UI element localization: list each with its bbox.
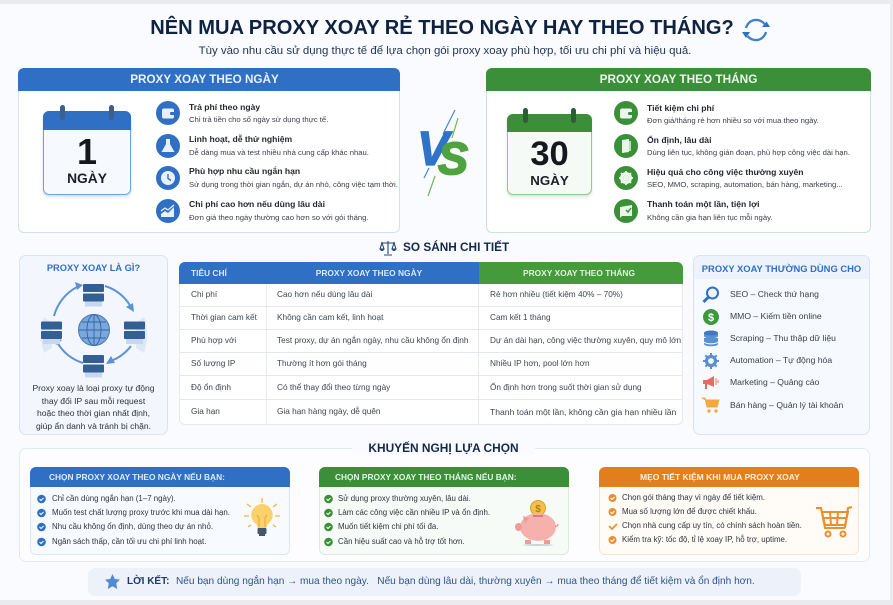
checklist: Muốn test chất lượng proxy trước khi mua dài hạn. [52, 508, 230, 517]
feature: ổn định [614, 134, 850, 158]
feature: ổn định: Dùng liên tục, không gián đoạn, phù hợp công việc dài hạn. [647, 148, 850, 157]
checklist: Ngân sách thấp, cần tối ưu chi phí linh hoạt. [52, 537, 206, 546]
icon: calendar 1 ngày: NGÀY [67, 171, 107, 186]
row: số lượng IP: Nhiều IP hơn, pool lớn hơn [490, 359, 590, 368]
row: độ ổn định [191, 382, 642, 392]
panel heading: PROXY XOAY THƯỜNG DÙNG CHO [702, 263, 861, 274]
icon: VS: S [438, 133, 468, 184]
row: gia hạn [191, 406, 676, 417]
feature: trả phí theo ngày [156, 101, 328, 125]
checklist: Nhu cầu không ổn định, dùng theo dự án nhỏ. [52, 522, 213, 531]
use: automation [703, 353, 832, 369]
feature: chi phí cao: Đơn giá theo ngày thường cao hơn so với gói tháng. [189, 213, 369, 222]
icon: shopping cart [816, 506, 852, 538]
panel heading [486, 68, 871, 91]
card heading: MẸO TIẾT KIỆM KHI MUA PROXY XOAY [640, 472, 800, 482]
feature: hiệu quả: Hiệu quả cho công việc thường xuyên [647, 167, 804, 177]
icon: calendar 30 ngày: NGÀY [530, 173, 569, 188]
subtitle: Tùy vào nhu cầu sử dụng thực tế để lựa chọn gói proxy xoay phù hợp, tối ưu chi phí và hiệu quả. [199, 45, 691, 57]
comparison table [179, 262, 683, 425]
heading: so sánh chi tiết: SO SÁNH CHI TIẾT [403, 240, 509, 254]
feature: tiết kiệm chi phí: Đơn giá/tháng rẻ hơn nhiều so với mua theo ngày. [647, 116, 819, 125]
icon: VS: V [417, 123, 453, 176]
checklist: Sử dụng proxy thường xuyên, lâu dài. [338, 494, 471, 503]
card: mẹo tiết kiệm [599, 467, 859, 555]
feature: tiết kiệm chi phí [614, 101, 819, 125]
feature: chi phí cao [156, 199, 369, 223]
definition text: giúp ẩn danh và tránh bị chặn. [36, 421, 151, 431]
row: thời gian cam kết: Không cần cam kết, linh hoạt [277, 313, 383, 322]
table header [179, 262, 683, 284]
use: bán hàng [702, 398, 843, 413]
panel: proxy xoay theo tháng [486, 68, 871, 233]
row: phù hợp với: Test proxy, dự án ngắn ngày, nhu cầu không ổn định [277, 336, 468, 345]
card heading [30, 467, 290, 487]
icon: light bulb [244, 498, 280, 536]
panel: proxy xoay theo ngày [18, 68, 400, 233]
panel: proxy xoay thường dùng cho [693, 255, 870, 435]
checklist: Kiểm tra kỹ: tốc độ, tỉ lệ xoay IP, hỗ trợ, uptime. [622, 535, 787, 544]
icon: calendar 1 ngày: 1 [77, 131, 97, 172]
checklist: Chỉ cần dùng ngắn hạn (1–7 ngày). [52, 494, 176, 503]
row: phù hợp với [191, 336, 681, 345]
panel heading [694, 256, 869, 279]
checklist: Mua số lượng lớn để được chiết khấu. [622, 507, 757, 516]
row: số lượng IP: Số lượng IP [191, 359, 235, 368]
definition text: Proxy xoay là loại proxy tự động [32, 383, 155, 393]
use: seo: SEO – Check thứ hạng [730, 289, 819, 299]
row: gia hạn: Gia hạn hàng ngày, dễ quên [277, 407, 381, 416]
closing banner: lời kết: LỜI KẾT: [127, 576, 169, 587]
checklist: Chọn nhà cung cấp uy tín, có chính sách hoàn tiền. [622, 521, 802, 530]
row: số lượng IP: Thường ít hơn gói tháng [277, 359, 367, 368]
closing banner: lời kết: Nếu bạn dùng ngắn hạn → mua theo ngày. Nếu bạn dùng lâu dài, thường xuyên → mua theo tháng để tiết kiệm và ổn định hơn. [176, 576, 755, 587]
feature: tiết kiệm chi phí: Tiết kiệm chi phí [647, 103, 714, 113]
use: automation: Automation – Tự động hóa [730, 355, 832, 365]
feature: trả phí theo ngày: Trả phí theo ngày [189, 102, 260, 112]
feature: thanh toán: Không cần gia hạn liên tục mỗi ngày. [647, 213, 773, 222]
row: thời gian cam kết: Thời gian cam kết [191, 313, 257, 322]
definition text: thay đổi IP sau mỗi request [42, 396, 145, 406]
table grid [266, 284, 267, 424]
panel heading: PROXY XOAY THEO THÁNG [600, 72, 757, 86]
row: chi phí: Chi phí [191, 290, 217, 299]
row: phù hợp với: Phù hợp với [191, 336, 236, 345]
checklist: Cần hiệu suất cao và hỗ trợ tốt hơn. [338, 537, 465, 546]
feature: linh hoạt: Dễ dàng mua và test nhiều nhà cung cấp khác nhau. [189, 148, 369, 157]
panel heading: PROXY XOAY THEO NGÀY [130, 73, 279, 86]
feature: hiệu quả: SEO, MMO, scraping, automation, bán hàng, marketing... [647, 180, 843, 189]
use: marketing: Marketing – Quảng cáo [730, 377, 819, 387]
use: mmo: MMO – Kiếm tiền online [730, 311, 822, 321]
panel heading [18, 68, 400, 91]
checklist [37, 494, 230, 546]
use: seo [702, 286, 819, 303]
checklist: Làm các công việc cần nhiều IP và ổn định. [338, 508, 490, 517]
checklist [324, 494, 490, 546]
feature: phù hợp ngắn hạn [156, 166, 398, 190]
use: scraping [704, 330, 836, 346]
diagram: rotating servers around globe [41, 282, 147, 378]
feature: hiệu quả [614, 166, 843, 190]
row: gia hạn: Gia hạn [191, 407, 220, 416]
icon: calendar 1 ngày [42, 105, 132, 198]
row: phù hợp với: Dự án dài hạn, công việc thường xuyên, quy mô lớn [490, 336, 681, 345]
closing banner: lời kết [88, 568, 801, 596]
row: số lượng IP [191, 359, 590, 368]
card: theo ngày [30, 467, 290, 555]
panel heading: PROXY XOAY LÀ GÌ? [47, 263, 140, 273]
feature: phù hợp ngắn hạn: Phù hợp nhu cầu ngắn hạn [189, 166, 300, 176]
title: NÊN MUA PROXY XOAY RẺ THEO NGÀY HAY THEO THÁNG? [150, 17, 734, 39]
row: gia hạn: Thanh toán một lần, không cần gia hạn nhiều lần [490, 407, 676, 417]
feature: linh hoạt [156, 134, 369, 158]
card heading [319, 467, 569, 487]
checklist: Chọn gói tháng thay vì ngày để tiết kiệm. [622, 493, 765, 502]
card heading [599, 467, 859, 487]
row: thời gian cam kết: Cam kết 1 tháng [490, 313, 551, 322]
table header: TIÊU CHÍ [191, 268, 227, 278]
row: độ ổn định: Độ ổn định [191, 383, 231, 392]
icon: piggy bank: $ [535, 504, 541, 515]
use: bán hàng: Bán hàng – Quản lý tài khoản [730, 400, 843, 410]
checklist [608, 493, 802, 544]
feature: thanh toán: Thanh toán một lần, tiện lợi [647, 199, 760, 209]
icon: piggy bank [515, 500, 559, 546]
feature: trả phí theo ngày: Chỉ trả tiền cho số ngày sử dụng thực tế. [189, 115, 328, 124]
icon: refresh arrows [742, 18, 770, 42]
heading: KHUYẾN NGHỊ LỰA CHỌN [368, 441, 519, 455]
feature: ổn định: Ổn định, lâu dài [647, 135, 711, 145]
row: chi phí [191, 290, 623, 299]
card heading: CHỌN PROXY XOAY THEO THÁNG NẾU BẠN: [335, 472, 517, 482]
icon: calendar 30 ngày: 30 [530, 135, 569, 173]
definition text [32, 383, 155, 431]
row: độ ổn định: Có thể thay đổi theo từng ngày [277, 383, 390, 392]
row: chi phí: Cao hơn nếu dùng lâu dài [277, 290, 372, 299]
use: mmo [703, 309, 822, 325]
row: độ ổn định: Ổn định hơn trong suốt thời gian sử dụng [490, 383, 642, 392]
icon: star [105, 574, 120, 589]
icon: VS [417, 110, 469, 196]
feature: thanh toán [614, 199, 773, 223]
feature: phù hợp ngắn hạn: Sử dụng trong thời gian ngắn, dự án nhỏ, công việc tạm thời. [189, 180, 398, 189]
definition text: hoặc theo thời gian nhất định, [37, 408, 150, 418]
table header: PROXY XOAY THEO NGÀY [316, 268, 422, 278]
panel: proxy xoay là gì [19, 255, 168, 435]
feature: chi phí cao: Chi phí cao hơn nếu dùng lâu dài [189, 199, 325, 209]
card: theo tháng [319, 467, 569, 555]
panel: khuyến nghị lựa chọn [19, 448, 870, 562]
checklist: Muốn tiết kiệm chi phí tối đa. [338, 522, 438, 531]
icon: scales [379, 241, 397, 256]
icon: calendar 30 ngày [506, 108, 593, 198]
feature: linh hoạt: Linh hoạt, dễ thử nghiệm [189, 134, 292, 144]
use: mmo: $ [708, 312, 714, 324]
row: chi phí: Rẻ hơn nhiều (tiết kiệm 40% – 70%) [490, 290, 623, 299]
row: thời gian cam kết [191, 313, 551, 322]
card heading: CHỌN PROXY XOAY THEO NGÀY NẾU BẠN: [49, 472, 225, 482]
use: marketing [703, 376, 819, 389]
use: scraping: Scraping – Thu thập dữ liệu [730, 333, 836, 343]
table header: PROXY XOAY THEO THÁNG [523, 268, 635, 278]
